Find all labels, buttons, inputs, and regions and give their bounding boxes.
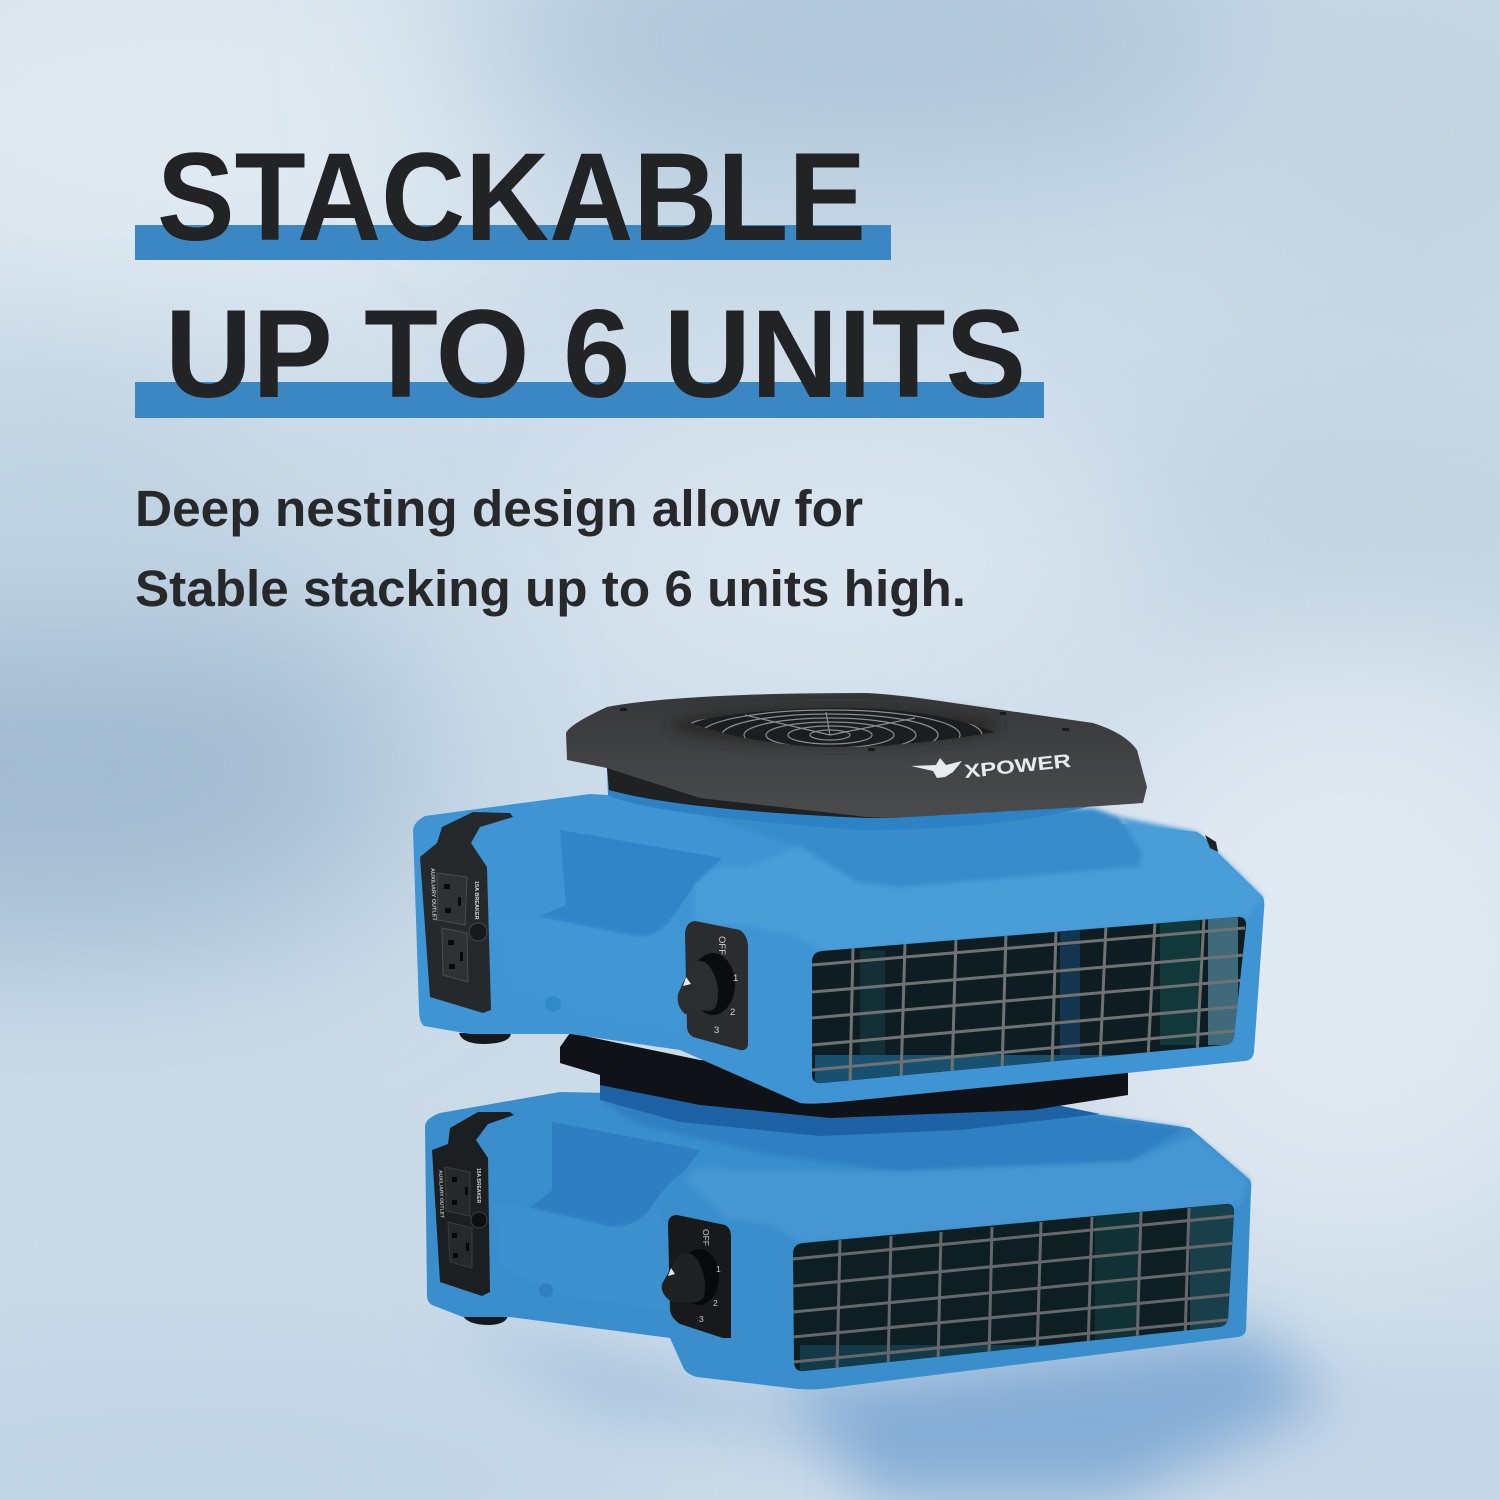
lower unit: breaker button: [471, 1212, 487, 1228]
lower unit: handle grip: [496, 1205, 668, 1310]
body text line two: Stable stacking up to 6 units high.: [135, 560, 966, 617]
upper unit: carry handle recess: [538, 830, 722, 937]
upper unit: rear bolt: [1205, 835, 1218, 852]
lower unit: top recess: [600, 1100, 1185, 1172]
lower unit: outlet panel: [432, 1112, 514, 1296]
lower unit: nose highlight: [684, 1135, 1250, 1243]
upper unit: fan recess: [670, 707, 1000, 745]
lower unit: rubber foot: [462, 1314, 508, 1325]
lower unit: speed labels: OFF: [701, 1229, 711, 1246]
upper unit: XPOWER logo: [911, 751, 1072, 783]
upper unit: plate screws: [620, 708, 1069, 751]
upper unit: speed control: [566, 693, 1147, 1050]
upper unit: XPOWER logo: XPOWER: [963, 751, 1072, 783]
upper unit: blue fan collar: [607, 768, 1095, 830]
floor shadow: [440, 1320, 1330, 1500]
lower unit: speed labels: [699, 1229, 721, 1324]
lower unit: knob pointer: [668, 1268, 675, 1276]
lower unit: panel label: 15A BREAKER: [475, 1168, 481, 1203]
lower unit: outlets: [445, 1167, 472, 1268]
title line two: UP TO 6 UNITS: [165, 285, 1026, 424]
lower unit: carry handle recess: [530, 1122, 700, 1227]
upper unit: bottom plate nested in lower unit: [560, 1033, 1128, 1118]
lower unit: speed control: [662, 1215, 731, 1338]
lower unit: speed labels: 3: [699, 1314, 704, 1324]
upper unit: fan grille: [688, 708, 994, 747]
upper unit: breaker label: 15A BREAKER: [473, 881, 479, 920]
upper unit: speed labels: 3: [714, 1025, 719, 1036]
upper unit: dark underside of fan plate: [607, 768, 1143, 818]
upper unit: outlet panel: [420, 812, 513, 1013]
upper air mover unit: [413, 693, 1264, 1118]
upper unit: knob: [678, 961, 718, 1014]
upper unit: speed labels: [714, 936, 738, 1036]
upper unit: side vent: [812, 915, 1246, 1085]
upper unit: outlet slots: [444, 884, 463, 969]
title line one: STACKABLE: [157, 128, 866, 267]
lower unit: side vent: [793, 1200, 1236, 1375]
upper unit: top recess under fan plate: [700, 808, 1143, 888]
highlight bar: line one: [135, 225, 891, 260]
upper unit: mount screw: [545, 996, 561, 1012]
lower unit: knob: [662, 1253, 705, 1302]
lower unit: panel warning text: AUXILIARY OUTLET: [437, 1170, 445, 1218]
lower unit: outlet slots: [452, 1177, 469, 1258]
upper unit: warning label: AUXILIARY OUTLET: [429, 868, 437, 922]
lower air mover unit: [425, 1082, 1251, 1390]
upper unit: fan plate: [566, 693, 1147, 818]
upper unit: breaker button: [469, 923, 487, 941]
upper unit: rubber foot: [459, 1033, 511, 1044]
upper unit: speed labels: 2: [730, 1007, 735, 1018]
upper unit: knob pointer: [683, 977, 691, 986]
upper unit: shell: [413, 794, 1264, 1104]
upper unit: outlets: [437, 873, 468, 982]
lower unit: mount screw: [539, 1283, 553, 1297]
lower unit: speed labels: 1: [716, 1264, 721, 1274]
lower unit: speed labels: 2: [713, 1298, 718, 1308]
lower unit: fan collar in shadow: [600, 1082, 1100, 1136]
upper unit: handle highlight: [498, 917, 685, 1030]
body text line one: Deep nesting design allow for: [135, 480, 863, 537]
upper unit: nose highlight: [695, 817, 1263, 951]
upper unit: speed labels: 1: [733, 973, 738, 984]
lower unit: shell: [425, 1092, 1251, 1390]
upper unit: speed labels: OFF: [716, 936, 727, 955]
highlight bar: line two: [135, 382, 1044, 418]
